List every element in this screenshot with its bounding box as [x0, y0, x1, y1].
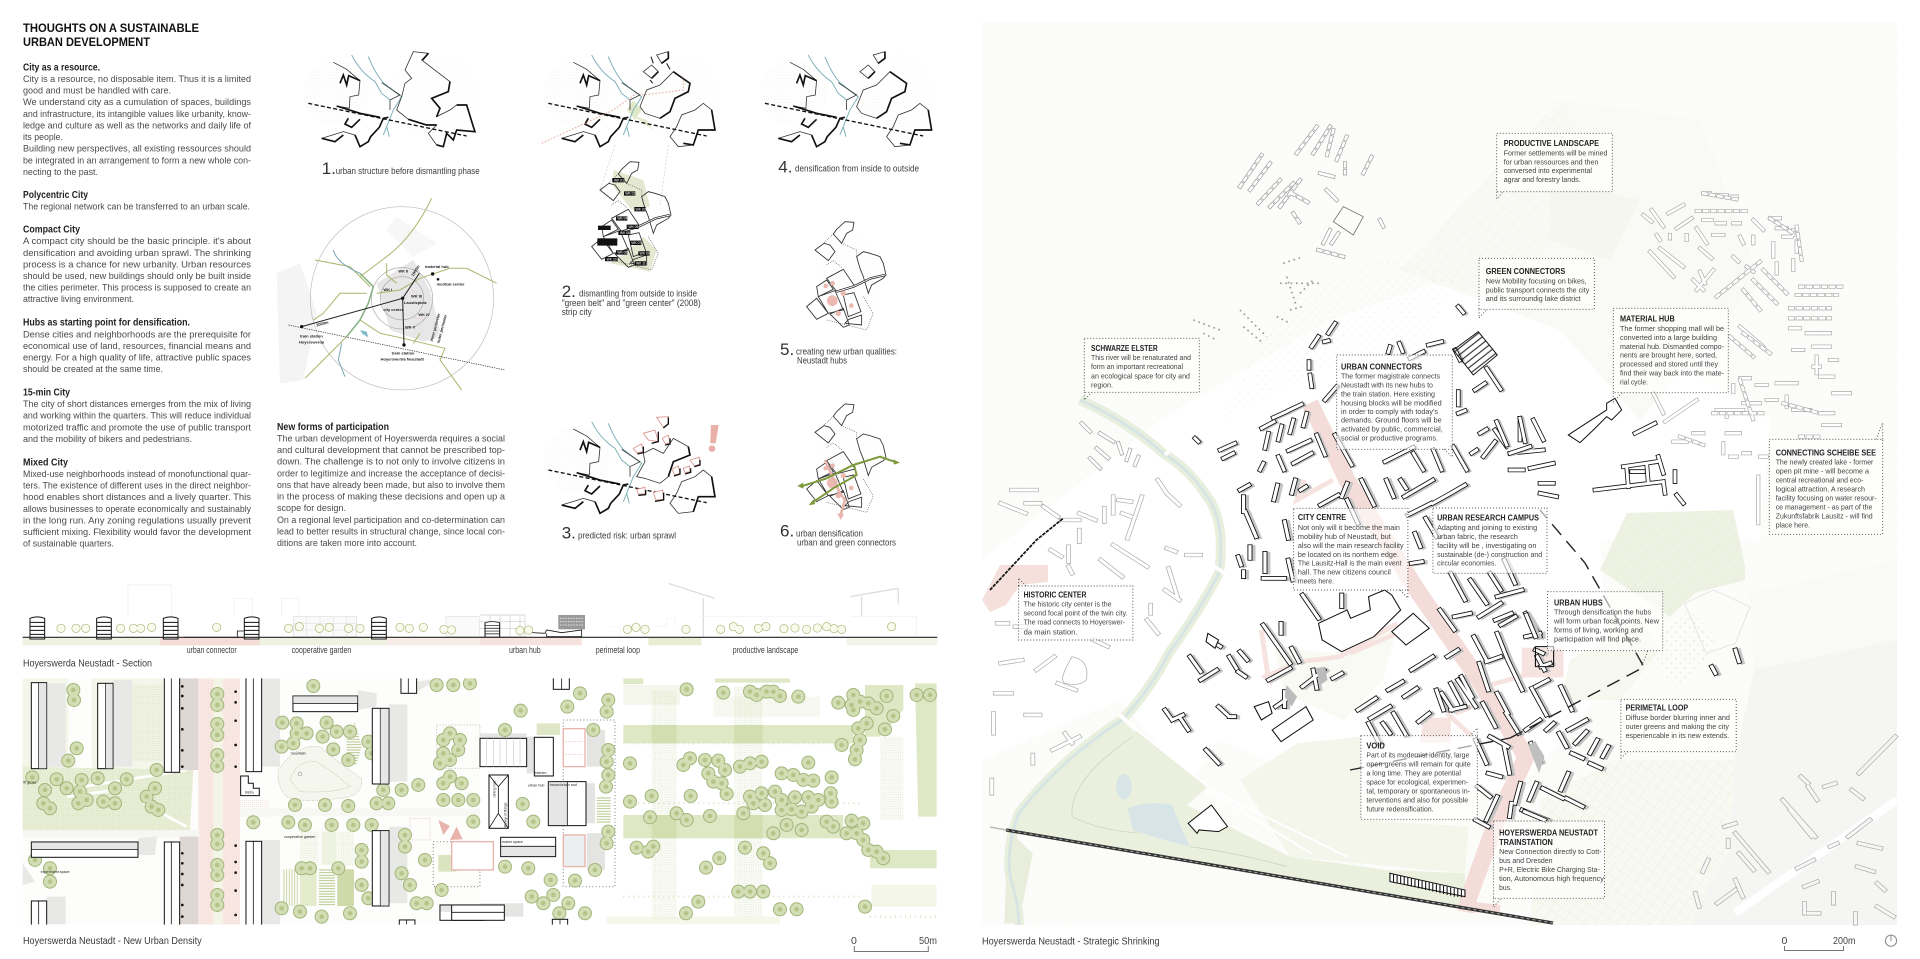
text block: compact city: A compact city should be the basic principle. it's about: [23, 236, 251, 247]
callout: city centre: mobility hub of Neustadt, but: [1298, 532, 1392, 541]
strip city detail map: WK 06: [620, 231, 630, 235]
callout: city centre: meets here.: [1298, 576, 1334, 585]
callout: urban hubs: will form urban focal points. New: [1553, 616, 1659, 625]
connector arrows: [797, 457, 900, 520]
black city buildings: [990, 307, 1742, 897]
icon: north arrow: [1885, 935, 1897, 946]
caption 1: 1.: [322, 159, 336, 178]
callout: city centre: be located on its northern edge.: [1298, 550, 1399, 559]
callout: green connectors: [1479, 258, 1594, 318]
radius map labels: train station: [300, 333, 323, 338]
text block: mixed city: in the long run. Any zoning regulations usually prevent: [23, 515, 251, 526]
map background: [982, 22, 1897, 925]
text block: city as a resource: We understand city as a cumulation of spaces, buildings: [23, 97, 251, 108]
strip city detail map: WK 02: [625, 192, 635, 196]
plan labels: hub: [493, 771, 578, 844]
callout: urban hubs: [1548, 592, 1663, 665]
callout: urban connectors: activated by public, commercial,: [1341, 425, 1443, 434]
text block: new forms of participation: [277, 422, 506, 549]
callout: schwarze elster: region.: [1091, 380, 1113, 389]
strip city detail map: [592, 162, 671, 272]
callout: schwarze elster: [1084, 338, 1199, 400]
callout: green connectors: public transport connects the city: [1486, 285, 1589, 294]
caption 1: urban structure before dismantling phase: [336, 166, 480, 176]
text block: hubs: Hubs as starting point for densification.: [23, 318, 190, 329]
callout: urban hubs: Through densification the hubs: [1554, 607, 1651, 616]
callout: hoyerswerda neustadt trainstation: [1494, 821, 1604, 907]
callout: urban connectors: [1337, 355, 1452, 457]
text block: new forms of participation: order to legitimize and increase the acceptance of decisi-: [277, 468, 505, 479]
text block: hubs: economical use of land, resources, financial means and: [23, 341, 251, 352]
text block: mixed city: Mixed City: [23, 457, 69, 468]
callout: historic center: [1019, 578, 1133, 640]
text block: new forms of participation: New forms of participation: [277, 422, 389, 433]
diagram 5: neustadt hubs: [780, 222, 897, 365]
plan labels: hub: urban hub: [528, 783, 544, 787]
callout: void: terventions and also for possible: [1366, 795, 1468, 804]
text block: polycentric city: Polycentric City: [23, 190, 88, 201]
text block: 15-min city: motorized traffic and promote the use of public transport: [23, 422, 251, 433]
callout: connecting scheibe see: central recreational and eco-: [1776, 476, 1864, 485]
text block: compact city: the cities perimeter. This process is supposed to create an: [23, 283, 251, 294]
caption 2: 2.: [562, 282, 576, 301]
caption 5: 5.: [780, 340, 794, 359]
caption 6: 6.: [780, 522, 794, 541]
text block: city as a resource: necting to the past.: [23, 167, 98, 178]
caption 5: creating new urban qualities:: [796, 346, 897, 356]
callout: urban connectors: demands. Ground floors will be: [1341, 416, 1442, 425]
callout: city centre: Not only will it become the main: [1298, 523, 1400, 532]
plan labels: hub: dining hall: [493, 781, 497, 797]
text block: polycentric city: [23, 190, 250, 212]
callout: urban hubs: URBAN HUBS: [1554, 598, 1603, 607]
panel: text column: [23, 21, 506, 550]
text block: new forms of participation: ditions are taken more into account.: [277, 538, 417, 549]
diagram 1: urban structure before dismantling: [303, 52, 477, 147]
text block: city as a resource: ledge and culture as well as the networks and daily life of: [23, 120, 251, 132]
site plan: east part: [452, 670, 943, 931]
callout: perimetal loop: Diffuse border blurring inner and: [1626, 713, 1730, 722]
callout: connecting scheibe see: facility focusing on water resour-: [1776, 494, 1877, 503]
section drawing: [23, 585, 480, 645]
callout: connecting scheibe see: logical attraction. A research: [1776, 485, 1865, 494]
radius map labels: outer perimeter: [435, 314, 448, 344]
text block: new forms of participation: in the process of making these decisions and open up a: [277, 492, 506, 503]
callout: urban research campus: URBAN RESEARCH CAMPUS: [1437, 514, 1539, 523]
callout: connecting scheibe see: Zukunftsfabrik Lausitz - will find: [1776, 511, 1873, 520]
caption 4: [778, 157, 919, 176]
scale bar 200m: [1782, 935, 1856, 950]
section caption: Hoyerswerda Neustadt - Section: [23, 657, 152, 669]
railway: [990, 827, 1553, 923]
plan labels: hub: forum/urban roof: [550, 783, 578, 787]
callout: void: Part of its modernist identity, large: [1366, 751, 1469, 760]
callout: urban research campus: urban fabric, the research: [1437, 532, 1518, 541]
title: THOUGHTS ON A SUSTAINABLE: [23, 21, 199, 35]
title: URBAN DEVELOPMENT: [23, 35, 151, 49]
radius map labels: WK I: [383, 287, 392, 292]
caption 6: urban and green connectors: [797, 538, 896, 548]
section labels: urban connector: [187, 645, 237, 655]
plan labels: experiment space: [41, 870, 70, 874]
text block: mixed city: Mixed-use neighborhoods instead of monofunctional quar-: [23, 469, 251, 480]
text block: compact city: should be used, new buildings should only be built inside: [23, 271, 251, 282]
strip city detail map: WK 03: [636, 207, 646, 211]
callout: hoyerswerda neustadt trainstation: bus and Dresden: [1499, 856, 1553, 865]
text block: hubs: should be created at the same time.: [23, 364, 163, 375]
icon: exclamation mark: [709, 425, 719, 452]
callout: material hub: rial cycle.: [1620, 378, 1648, 387]
title: [23, 21, 199, 49]
text block: new forms of participation: and cultural development that cannot be prescribed top-: [277, 445, 505, 456]
callout: urban research campus: [1433, 508, 1547, 573]
callout: connecting scheibe see: place here.: [1776, 520, 1810, 529]
diagram 3: predicted risk urban sprawl: [543, 417, 719, 542]
text block: 15-min city: and working within the quarters. This will reduce individual: [23, 411, 251, 422]
caption 6: urban densification: [796, 528, 863, 538]
caption 1: [322, 159, 480, 178]
strip city detail map: WK 11: [636, 262, 646, 266]
scale bar 200m: 200m: [1833, 935, 1856, 947]
callout: void: [1361, 728, 1477, 819]
text block: new forms of participation: On a regional level participation and co-determination can: [277, 515, 505, 526]
caption 3: 3.: [562, 524, 576, 542]
text block: 15-min city: and the mobility of bikers and pedestrians.: [23, 434, 192, 445]
callout: hoyerswerda neustadt trainstation: P+R, Electric Bike Charging Sta-: [1499, 865, 1600, 874]
text block: polycentric city: The regional network can be transferred to an urban scale.: [23, 202, 250, 212]
text block: hubs: [23, 318, 252, 375]
callout: material hub: nents are brought here, sorted,: [1620, 351, 1717, 360]
radius map labels: WK IV: [418, 312, 430, 317]
caption 2: strip city: [562, 307, 592, 317]
text block: mixed city: of sustainable quarters.: [23, 539, 114, 550]
callout: urban connectors: the train station. Here existing: [1341, 389, 1435, 398]
callout: hoyerswerda neustadt trainstation: TRAINSTATION: [1499, 838, 1553, 847]
callout: urban hubs: forms of living, working and: [1554, 625, 1643, 634]
callout: city centre: also will the main research facility: [1298, 541, 1404, 550]
plan labels: fit grove: [23, 781, 36, 785]
diagram: regional radius map: [277, 198, 505, 390]
callout: schwarze elster: form an important recreational: [1091, 362, 1183, 371]
text block: new forms of participation: The urban development of Hoyerswerda requires a social: [277, 434, 505, 444]
radius map labels: WK II: [398, 268, 408, 273]
callout: schwarze elster: an ecological space for city and: [1091, 371, 1190, 380]
text block: city as a resource: City is a resource, no disposable item. Thus it is a limited: [23, 74, 251, 85]
map: strategic shrinking: [982, 22, 1897, 925]
text block: new forms of participation: lead to better results in structural change, since local con-: [277, 526, 505, 537]
text block: city as a resource: its people.: [23, 132, 63, 143]
caption 5: [780, 340, 897, 365]
site plan: new urban density: [0, 670, 484, 931]
text block: new forms of participation: scope for design.: [277, 503, 346, 514]
strip city detail map: WK 09: [640, 252, 650, 256]
callout: connecting scheibe see: [1769, 423, 1883, 534]
section labels: productive landscape: [733, 645, 798, 655]
caption 5: Neustadt hubs: [797, 355, 847, 365]
text block: compact city: attractive living environment.: [23, 294, 134, 305]
radius map labels: city center: [383, 307, 404, 312]
scale bar 200m: 0: [1782, 935, 1788, 947]
text block: compact city: process is a chance for new urbanity. Urban resources: [23, 259, 251, 270]
callout: material hub: MATERIAL HUB: [1620, 315, 1675, 324]
radius map labels: Hoyerswerda: [299, 339, 325, 344]
callout: connecting scheibe see: The newly created lake - former: [1776, 458, 1874, 467]
callout: material hub: processed and stored until they: [1620, 360, 1718, 369]
callout: productive landscape: conversed into experimental: [1504, 166, 1592, 175]
callout: urban connectors: social or productive programs.: [1341, 434, 1438, 443]
text block: 15-min city: [23, 388, 251, 445]
callout: city centre: The Lausitz-Hall is the main event: [1298, 559, 1402, 568]
callout: void: VOID: [1366, 742, 1385, 751]
strip city detail map: WK 08: [617, 251, 627, 255]
callout: historic center: The historic city center is the: [1024, 600, 1112, 609]
text block: mixed city: allows businesses to operate economically and sustainably: [23, 504, 251, 515]
diagram 4: densification from inside to outside: [760, 52, 933, 176]
callout: urban connectors: in order to comply with today's: [1341, 407, 1438, 416]
plan labels: cooperative garden: [284, 835, 315, 839]
callout: perimetal loop: [1621, 699, 1736, 758]
radius map labels: WK V: [405, 324, 416, 329]
caption 2: [562, 282, 701, 317]
callout: void: a long time. They are potential: [1366, 769, 1461, 778]
callout: urban research campus: Adapting and joining to existing: [1437, 523, 1537, 532]
text block: city as a resource: be integrated in an arrangement to form a new whole con-: [23, 155, 251, 166]
text block: compact city: [23, 225, 251, 305]
urban connector boulevard: [982, 403, 1561, 912]
river schwarze elster: [1009, 400, 1232, 925]
callout: productive landscape: agrar and forestry lands.: [1504, 175, 1581, 184]
callout: urban connectors: The former magistrale connects: [1341, 371, 1440, 380]
callout: connecting scheibe see: ce management - as part of the: [1776, 503, 1872, 512]
callout: historic center: The road connects to Hoyerswer-: [1024, 618, 1125, 627]
text block: mixed city: ters. The existence of different uses in the direct neighbor-: [23, 481, 251, 492]
callout: city centre: [1294, 508, 1408, 598]
callout: perimetal loop: PERIMETAL LOOP: [1626, 704, 1688, 713]
diagram 2: dismantling from outside to inside: [542, 52, 717, 317]
callout: productive landscape: [1497, 133, 1612, 199]
plan labels: hub: library of things: [504, 802, 508, 827]
callout: urban connectors: Neustadt with its new hubs to: [1341, 380, 1433, 389]
caption 4: densification from inside to outside: [795, 164, 919, 174]
text block: new forms of participation: ons that have already been made, but also to involve them: [277, 480, 505, 491]
radius map labels: train station: [392, 350, 415, 355]
text block: mixed city: [23, 457, 251, 550]
callout: city centre: hall. The new citizens council: [1298, 568, 1391, 577]
radius map labels: Hoyerswerda Neustadt: [381, 356, 425, 361]
callout: historic center: HISTORIC CENTER: [1024, 590, 1087, 599]
caption 6: [780, 522, 896, 548]
callout: hoyerswerda neustadt trainstation: New Connection directly to Cott-: [1499, 847, 1602, 856]
callout: material hub: find their way back into the mate-: [1620, 369, 1724, 378]
callout: hoyerswerda neustadt trainstation: bus.: [1499, 883, 1512, 892]
callout: green connectors: and its surroundig lake district: [1486, 294, 1581, 303]
callout: productive landscape: PRODUCTIVE LANDSCAPE: [1504, 139, 1599, 148]
callout: urban connectors: URBAN CONNECTORS: [1341, 362, 1422, 371]
callout: urban research campus: facility will be , investigating on: [1437, 541, 1536, 550]
scale bar 50m: [851, 935, 937, 952]
text block: new forms of participation: down. The challenge is to not only to involve citizens in: [277, 457, 505, 468]
callout: schwarze elster: This river will be renaturated and: [1091, 353, 1191, 362]
callout: urban connectors: housing blocks will be modified: [1341, 398, 1442, 407]
strip city detail map: WK 05: [628, 225, 638, 229]
radius map labels: material hub: [425, 264, 449, 269]
radius map labels: 3000m: [316, 319, 329, 328]
callout: perimetal loop: esperiencable in its new extends.: [1626, 731, 1729, 740]
section labels: perimetal loop: [596, 645, 640, 655]
caption 2: "green belt" and "green center" (2008): [562, 298, 701, 308]
callout: productive landscape: for urban ressources and then: [1504, 157, 1598, 166]
grey outlying buildings: [992, 127, 1895, 923]
callout: schwarze elster: SCHWARZE ELSTER: [1091, 344, 1158, 353]
plan labels: mountain: [291, 751, 306, 755]
radius map labels: 1000m: [410, 264, 421, 277]
park and pale green zones: [1004, 627, 1469, 923]
strip city detail map: WK 04: [617, 217, 627, 221]
section labels: cooperative garden: [292, 645, 351, 655]
plan labels: hub: kitchen: [535, 771, 547, 775]
plan labels: [23, 751, 315, 874]
caption 2: dismantling from outside to inside: [579, 289, 697, 299]
callout: urban research campus: circular economies.: [1437, 559, 1496, 568]
radius map labels: medical center: [437, 281, 465, 286]
text block: city as a resource: and infrastructure, its intangible values like urbanity, know-: [23, 109, 251, 120]
map caption: Hoyerswerda Neustadt - Strategic Shrinking: [982, 935, 1160, 947]
caption 3: [562, 524, 676, 542]
callout: connecting scheibe see: open pit mine - will become a: [1776, 467, 1870, 476]
text block: city as a resource: good and must be handled with care.: [23, 86, 171, 97]
callout: historic center: da main station.: [1024, 627, 1078, 636]
section drawing: east part: [480, 583, 937, 645]
caption 4: 4.: [778, 157, 792, 176]
callout: material hub: material hub. Dismantled compo-: [1620, 342, 1724, 351]
callout: void: tal, temporary or spontaneous in-: [1366, 787, 1470, 796]
strip city detail map: WK 07: [631, 241, 641, 245]
diagram 6: urban and green connectors: [780, 404, 900, 548]
scale bar 50m: 0: [851, 935, 857, 947]
callout: productive landscape: Former settlements will be mined: [1504, 148, 1607, 157]
section labels: urban hub: [509, 645, 541, 655]
callout: void: open greens will remain for quite: [1366, 760, 1471, 769]
callout: material hub: converted into a large building: [1620, 333, 1717, 342]
text block: mixed city: sufficient mixing. Flexibility would favor the development: [23, 527, 251, 538]
text block: hubs: energy. For a high quality of life, attractive public spaces: [23, 353, 251, 364]
callout: connecting scheibe see: CONNECTING SCHEIBE SEE: [1776, 449, 1876, 458]
text block: 15-min city: 15-min City: [23, 388, 70, 398]
callout: hoyerswerda neustadt trainstation: tion, Autonomous high frequency: [1499, 874, 1604, 883]
callout: material hub: The former shopping mall will be: [1620, 324, 1724, 333]
callout: void: future redensification.: [1366, 804, 1434, 813]
caption 3: predicted risk: urban sprawl: [578, 531, 676, 541]
dashed perimeter: [1350, 510, 1644, 770]
radius map labels: [299, 264, 465, 361]
plan labels: hub: maker space: [502, 840, 523, 844]
text block: city as a resource: [23, 62, 251, 178]
plan caption: Hoyerswerda Neustadt - New Urban Density: [23, 935, 202, 947]
section labels: [187, 645, 798, 655]
strip city detail map: WK 10: [607, 257, 617, 261]
text block: city as a resource: City as a resource.: [23, 62, 100, 74]
text block: compact city: densification and avoiding urban sprawl. The shrinking: [23, 248, 251, 259]
text block: mixed city: hood enables short distances and a lively quarter. This: [23, 492, 251, 503]
plan labels: bistro: [245, 790, 254, 794]
callout: void: space for ecological, experimen-: [1366, 778, 1469, 787]
radius map labels: inner perimeter: [429, 312, 441, 342]
callout: perimetal loop: outer greens and making the city: [1626, 722, 1729, 731]
text block: 15-min city: The city of short distances emerges from the mix of living: [23, 399, 251, 410]
callout: city centre: CITY CENTRE: [1298, 513, 1346, 522]
callout: hoyerswerda neustadt trainstation: HOYERSWERDA NEUSTADT: [1499, 829, 1598, 838]
sprawl houses: [633, 417, 700, 501]
radius map labels: WK III: [411, 294, 422, 299]
callout: material hub: [1613, 308, 1728, 402]
strip city detail map: WK 01: [614, 178, 624, 182]
radius map labels: Lausitzplatz: [404, 300, 427, 305]
callout: green connectors: GREEN CONNECTORS: [1486, 267, 1565, 276]
text block: city as a resource: Building new perspectives, all existing ressources should: [23, 144, 251, 155]
callout: historic center: second focal point of the twin city.: [1024, 609, 1128, 618]
scale bar 50m: 50m: [919, 935, 937, 947]
text block: compact city: Compact City: [23, 225, 80, 236]
callout: urban hubs: participation will find place.: [1554, 634, 1641, 643]
callout: urban research campus: sustainable (de-) construction and: [1437, 550, 1542, 559]
text block: hubs: Dense cities and neighborhoods are the prerequisite for: [23, 329, 252, 340]
callout: green connectors: New Mobility focusing on bikes,: [1486, 276, 1587, 285]
